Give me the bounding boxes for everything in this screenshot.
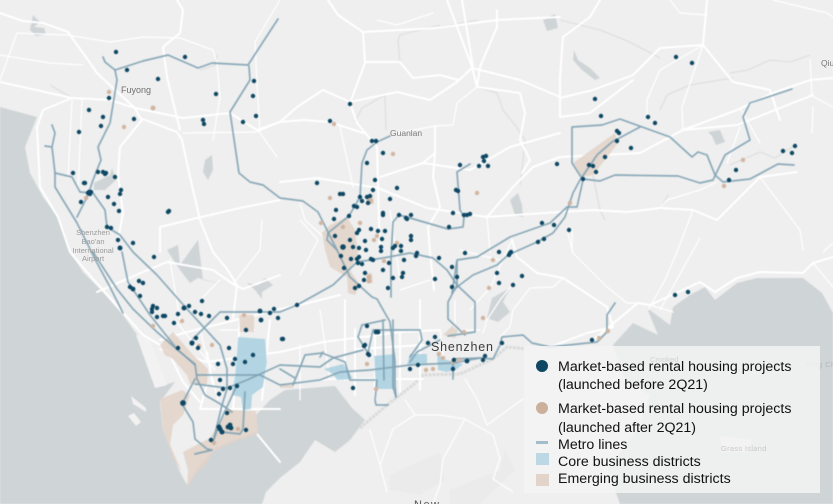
legend marker: launched after 2Q21: [536, 402, 548, 414]
legend text: launched before 2Q21: (launched before 2Q21): [558, 377, 708, 393]
legend text: metro lines: Metro lines: [558, 437, 627, 453]
emerging business districts: [160, 133, 618, 487]
label: Shenzhen Bao'an International Airport: Shenzhen: [76, 228, 110, 237]
legend marker: metro lines: [536, 441, 548, 444]
label: Shenzhen Bao'an International Airport: Airport: [82, 254, 105, 263]
reclaimed land and islands: [128, 335, 752, 452]
label: Crooked Island: Crooked: [650, 355, 678, 364]
label: Shenzhen Bao'an International Airport: International: [72, 246, 114, 255]
market-based projects launched before 2Q21: [71, 50, 797, 442]
legend text: launched before 2Q21: Market-based rental housing projects: [558, 359, 791, 375]
legend text: core business districts: Core business districts: [558, 454, 701, 470]
label: Shenzhen: Shenzhen: [431, 340, 494, 354]
core business districts: [232, 337, 463, 410]
Shenzhen River border: [360, 347, 527, 428]
label: Grass Island: Grass Island: [721, 444, 767, 453]
legend text: launched after 2Q21: Market-based rental housing projects: [558, 401, 791, 417]
metro lines: [45, 19, 794, 454]
legend panel: [524, 346, 820, 493]
legend marker: core business districts: [536, 453, 549, 465]
label: Guanlan: Guanlan: [390, 128, 422, 138]
label: Shenzhen Bao'an International Airport: Bao'an: [81, 237, 105, 246]
legend text: launched after 2Q21: (launched after 2Q21): [558, 420, 696, 436]
legend marker: launched before 2Q21: [536, 360, 548, 372]
legend marker: emerging business districts: [536, 474, 549, 486]
legend text: emerging business districts: Emerging business districts: [558, 471, 731, 487]
market-based projects launched after 2Q21: [84, 90, 745, 445]
Hong Kong side pale hills: [390, 450, 515, 504]
label: Fuyong: Fuyong: [121, 85, 151, 95]
rivers: [50, 20, 810, 220]
